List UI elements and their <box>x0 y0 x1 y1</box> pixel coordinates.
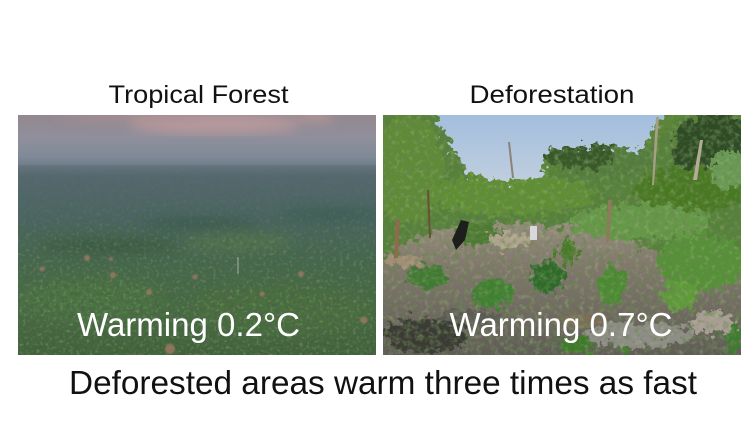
label: warming 0.2°C: Warming 0.2°C <box>77 306 300 343</box>
caption: Deforested areas warm three times as fast <box>69 364 697 401</box>
panel: deforestation photo <box>372 110 754 355</box>
heading: Deforestation: Deforestation <box>470 81 634 109</box>
infographic <box>18 85 741 394</box>
heading: Tropical Forest: Tropical Forest <box>108 81 289 109</box>
panel: tropical forest photo <box>18 110 380 355</box>
tree trunks and stumps <box>394 117 703 258</box>
label: warming 0.7°C: Warming 0.7°C <box>450 306 672 343</box>
